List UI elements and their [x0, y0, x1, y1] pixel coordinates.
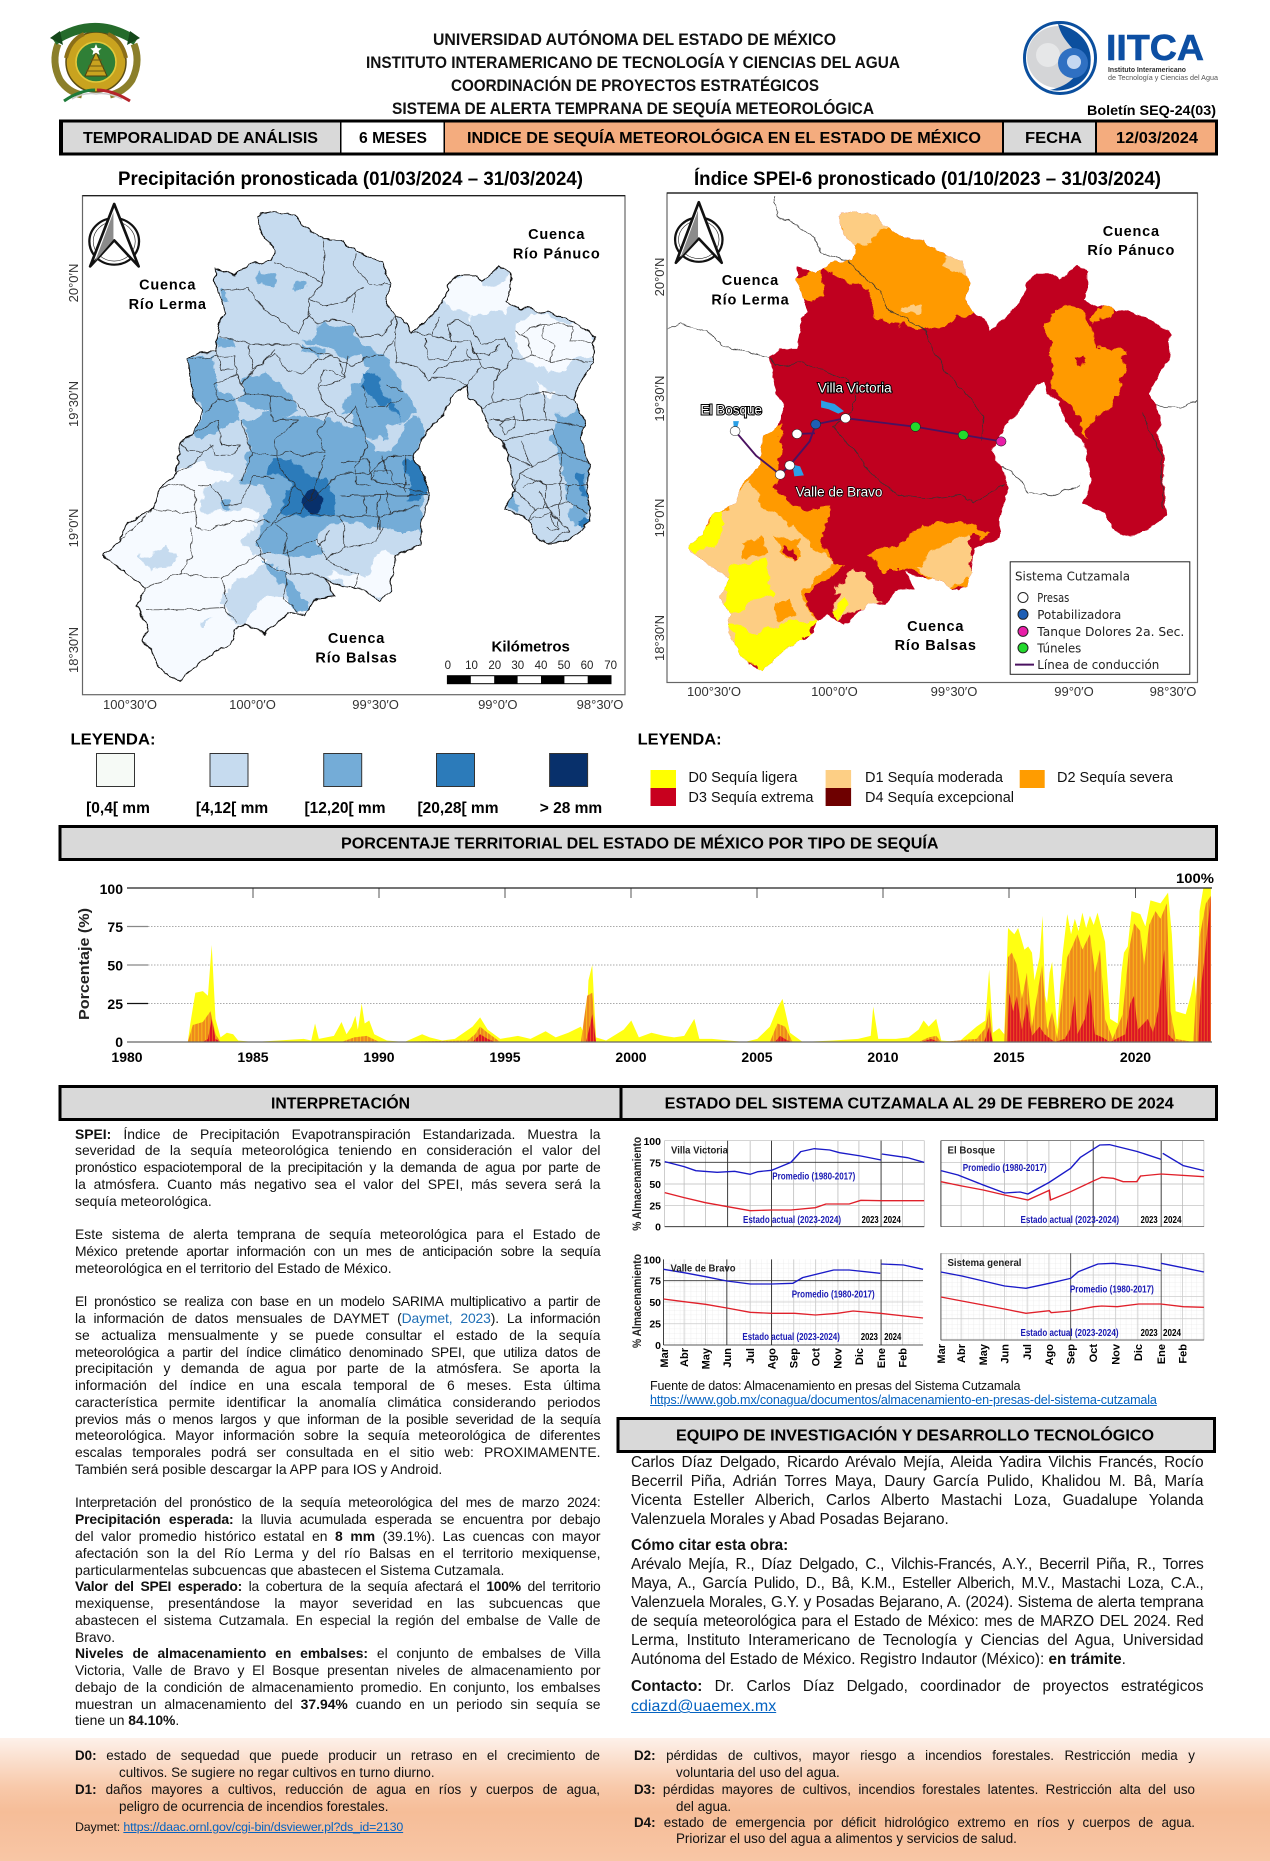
chart labels: El Bosque: 2023 — [1141, 1215, 1158, 1226]
chart labels: El Bosque: 2024 — [1164, 1215, 1182, 1226]
text: citation — [631, 1537, 1204, 1668]
heading: research team: EQUIPO DE INVESTIGACIÓN Y DESARROLLO TECNOLÓGICO — [676, 1426, 1154, 1444]
scale bar: 40 — [535, 660, 547, 672]
text: interpretation: afectación son la del Río Lerma y del río Balsas en el territorio mexiquense, — [75, 1545, 600, 1561]
text: team members: Carlos Díaz Delgado, Ricardo Arévalo Mejía, Aleida Yadira Vilchis Francés, Rocío — [631, 1454, 1204, 1471]
text: interpretation: precipitación y demanda de agua por parte de la atmósfera. Se aporta la — [75, 1360, 600, 1376]
month labels: left: Abr — [679, 1347, 691, 1367]
label: El Bosque: El Bosque — [701, 402, 762, 418]
text: D2 D3 D4 definitions: Priorizar el uso del agua a alimentos y servicios de salud. — [676, 1830, 1017, 1846]
text: contact: cdiazd@uaemex.mx — [631, 1698, 776, 1715]
header strip — [59, 120, 1218, 156]
latitude axis labels: 19°0′N — [66, 509, 81, 547]
text: interpretation: Valor del SPEI esperado: la cobertura de la sequía afectará el 100% del territorio — [75, 1578, 600, 1594]
scale bar: Kilómetros — [492, 638, 570, 656]
text: interpretation: meteorológica en el territorio del Estado de México. — [75, 1260, 392, 1276]
legend: Sistema Cutzamala: Tanque Dolores 2a. Sec. — [1036, 625, 1184, 639]
text: team members — [631, 1454, 1204, 1528]
text: interpretation: Bravo. — [75, 1629, 115, 1645]
text: interpretation: Este sistema de alerta temprana de sequía meteorológica para el Estado de — [75, 1226, 600, 1242]
logo: UAEM crest — [50, 28, 140, 101]
legend: precipitation: [4,12[ mm — [196, 800, 268, 817]
label: Río Lerma basin — [129, 278, 207, 313]
chart: territorial percentage by drought type — [77, 870, 1215, 1065]
panel: Cutzamala storage charts — [632, 1136, 1204, 1369]
text: interpretation: abastecen el sistema Cutzamala. En especial la región del embalse de Valle de — [75, 1612, 600, 1628]
title block: INSTITUTO INTERAMERICANO DE TECNOLOGÍA Y CIENCIAS DEL AGUA — [366, 53, 900, 72]
title block: UNIVERSIDAD AUTÓNOMA DEL ESTADO DE MÉXICO — [433, 30, 836, 49]
text: interpretation: SPEI: Índice de Precipitación Evapotranspiración Estandarizada. Muestra la — [75, 1126, 600, 1142]
chart labels: Villa Victoria: 2023 — [862, 1215, 879, 1226]
heading: interpretation — [60, 1086, 621, 1120]
y axis labels: 75 — [107, 919, 123, 935]
text: contact: Contacto: Dr. Carlos Díaz Delgado, coordinador de proyectos estratégicos — [631, 1678, 1204, 1695]
legend: drought classes: D3 Sequía extrema — [688, 790, 814, 806]
month labels: right: Abr — [956, 1343, 968, 1363]
bulletin number: Boletín SEQ-24(03) — [1087, 102, 1216, 118]
label: Río Balsas basin: Cuenca — [907, 619, 964, 635]
scale bar: 60 — [581, 660, 593, 672]
text: interpretation: Niveles de almacenamiento en embalses: el conjunto de embalses de Villa — [75, 1645, 600, 1661]
latitude axis labels — [66, 264, 81, 673]
longitude axis labels: 100°0′O — [811, 684, 858, 699]
text: D2 D3 D4 definitions: del agua. — [676, 1798, 731, 1814]
map: drought classes — [688, 211, 1172, 672]
longitude axis labels: 100°30′O — [103, 697, 157, 712]
text: interpretation: meteorológica a partir del índice climático denominado SPEI, que utiliza datos de — [75, 1344, 600, 1360]
chart labels: Sistema general: Estado actual (2023-2024) — [1020, 1328, 1118, 1339]
chart labels: El Bosque: Promedio (1980-2017) — [963, 1163, 1047, 1174]
header strip: 12/03/2024 — [1116, 130, 1198, 147]
chart: Valle de Bravo curves — [664, 1259, 923, 1345]
storage axis labels: 50 — [649, 1179, 661, 1191]
chart labels: Valle de Bravo: Estado actual (2023-2024) — [742, 1332, 840, 1343]
full page graphics — [50, 21, 1218, 1453]
text: interpretation: la información de datos mensuales de DAYMET (Daymet, 2023). La información — [75, 1310, 600, 1326]
chart labels: Valle de Bravo: Promedio (1980-2017) — [792, 1290, 875, 1300]
text: D0 D1 definitions: cultivos. Se sugiere no regar cultivos en turno diurno. — [119, 1764, 435, 1780]
legend: drought classes: LEYENDA: — [638, 732, 722, 748]
storage axis labels: 25 — [649, 1200, 661, 1212]
text: contact — [631, 1678, 1204, 1715]
chart labels: Valle de Bravo: 2023 — [861, 1332, 878, 1343]
y axis labels: 0 — [115, 1034, 123, 1050]
heading: drought percentage — [60, 826, 1216, 860]
month labels: left: May — [700, 1347, 712, 1369]
label: Río Balsas basin: Río Balsas — [895, 638, 977, 654]
latitude axis labels: 19°30′N — [66, 381, 81, 427]
label: Río Balsas basin: Río Balsas — [315, 651, 398, 667]
chart labels: Sistema general — [948, 1258, 1181, 1339]
header strip: 6 MESES — [359, 130, 427, 147]
scale bar — [445, 638, 617, 684]
legend: Sistema Cutzamala: Presas — [1037, 591, 1069, 605]
branch line — [797, 431, 815, 436]
label: Río Balsas basin: Cuenca — [328, 631, 385, 647]
storage axis labels: 0 — [655, 1340, 661, 1352]
text: interpretation: particularmentelas subcuencas que abastecen el Sistema Cutzamala. — [75, 1562, 504, 1578]
label: Río Pánuco basin: Río Pánuco — [513, 246, 601, 262]
month labels: left: Nov — [833, 1347, 845, 1369]
storage axis labels: 25 — [649, 1318, 661, 1330]
title block — [366, 30, 900, 118]
legend: drought classes: D1 Sequía moderada — [865, 770, 1004, 786]
x axis labels: 2020 — [1120, 1049, 1151, 1065]
x axis labels: 2010 — [867, 1049, 899, 1065]
text: interpretation: muestran un almacenamiento del 37.94% cuando en un periodo sin sequía se — [75, 1696, 600, 1712]
chart: Villa Victoria curves — [665, 1141, 924, 1227]
text: interpretation: También será posible descargar la APP para IOS y Android. — [75, 1461, 442, 1477]
text: interpretation: severidad de la sequía meteorológica teniendo en consideración el valor del — [75, 1142, 600, 1158]
legend: Sistema Cutzamala — [1010, 562, 1190, 674]
storage axis titles — [632, 1137, 644, 1348]
month labels: right: Ago — [1044, 1344, 1056, 1365]
map: interior basin lines — [771, 261, 1163, 509]
text: D2 D3 D4 definitions: D2: pérdidas de cultivos, mayor riesgo a incendios forestales. Restricción media y — [634, 1748, 1195, 1762]
text: interpretation: debajo de la condición de almacenamiento promedio. En conjunto, los embalses — [75, 1679, 600, 1695]
y axis labels — [100, 881, 123, 1050]
y axis labels: 25 — [107, 996, 123, 1012]
longitude axis labels: 99°30′O — [352, 697, 399, 712]
x axis labels: 1990 — [363, 1049, 395, 1065]
storage axis labels — [643, 1136, 661, 1352]
x axis labels — [111, 1049, 1151, 1065]
x axis labels: 1995 — [489, 1049, 521, 1065]
heading: SPEI map: Índice SPEI-6 pronosticado (01/10/2023 – 31/03/2024) — [694, 168, 1161, 190]
storage axis labels: 50 — [649, 1297, 661, 1309]
system points — [730, 414, 1006, 479]
legend: precipitation: [12,20[ mm — [305, 800, 385, 817]
text: interpretation: Interpretación del pronóstico de la sequía meteorológica del mes de marzo 2024: — [75, 1494, 600, 1510]
month labels: right: Oct — [1088, 1344, 1100, 1362]
text: D2 D3 D4 definitions — [634, 1748, 1195, 1846]
header strip: INDICE DE SEQUÍA METEOROLÓGICA EN EL ESTADO DE MÉXICO — [467, 128, 981, 147]
legend: drought classes: D2 Sequía severa — [1057, 770, 1174, 786]
legend: drought classes: D4 Sequía excepcional — [865, 790, 1014, 806]
text: citation: Arévalo Mejía, R., Díaz Delgado, C., Vilchis-Francés, A.Y., Becerril Piña, R., Torres — [631, 1556, 1204, 1573]
chart labels: Sistema general: Promedio (1980-2017) — [1070, 1284, 1154, 1296]
text: team members: Valenzuela Morales y Abad Posadas Bejarano. — [631, 1511, 949, 1528]
series: D0 — [188, 888, 1211, 1042]
logo: IITCA: de Tecnología y Ciencias del Agua — [1108, 73, 1219, 82]
text: interpretation: Precipitación esperada: la lluvia acumulada esperada se encuentra por debajo — [75, 1511, 600, 1527]
text: data source: Fuente de datos: Almacenamiento en presas del Sistema Cutzamala — [650, 1379, 1020, 1393]
legend: Sistema Cutzamala: Potabilizadora — [1037, 608, 1121, 622]
scale bar: 20 — [488, 660, 501, 672]
chart labels: El Bosque: El Bosque — [948, 1146, 995, 1156]
header strip: FECHA — [1025, 130, 1082, 147]
text: interpretation — [75, 1126, 601, 1728]
longitude axis labels: 98°30′O — [1150, 684, 1196, 699]
text: interpretation: característica permite identificar la anomalía climática considerando periodos — [75, 1394, 600, 1410]
scale bar: 50 — [558, 660, 570, 672]
month labels: right: Nov — [1111, 1343, 1123, 1365]
text: interpretation: se actualiza mensualmente y se puede consultar el estado de la sequía — [75, 1327, 600, 1343]
chart labels: Sistema general: 2024 — [1163, 1328, 1181, 1339]
month labels: right: Jul — [1022, 1344, 1034, 1360]
text: citation: Cómo citar esta obra: — [631, 1537, 788, 1554]
month labels: right: May — [978, 1343, 990, 1365]
scale bar: 30 — [511, 660, 524, 672]
y axis title: Porcentaje (%) — [77, 908, 93, 1020]
text: D2 D3 D4 definitions: D4: estado de emergencia por déficit hidrológico extremo en ríos y cuerpos de agua. — [634, 1814, 1195, 1830]
latitude axis labels — [652, 258, 667, 661]
text: team members: Becerril Piña, Adrián Torres Maya, Daury García Pulido, Khalidou M. Bâ, María — [631, 1473, 1204, 1490]
text: D0 D1 definitions: D1: daños mayores a cultivos, reducción de agua en ríos y cuerpos de agua, — [75, 1782, 600, 1796]
longitude axis labels — [687, 684, 1196, 699]
text: interpretation: sequía meteorológica. — [75, 1193, 212, 1209]
x axis labels: 1985 — [237, 1049, 269, 1065]
chart labels: Valle de Bravo: 2024 — [884, 1332, 902, 1343]
month labels: left: Ene — [876, 1348, 888, 1368]
chart: El Bosque curves — [941, 1141, 1204, 1227]
month labels: right: Feb — [1178, 1344, 1190, 1364]
longitude axis labels — [103, 697, 623, 712]
heading: drought percentage: PORCENTAJE TERRITORIAL DEL ESTADO DE MÉXICO POR TIPO DE SEQUÍA — [341, 836, 938, 852]
text: D2 D3 D4 definitions: voluntaria del uso del agua. — [676, 1764, 840, 1780]
latitude axis labels: 19°30′N — [652, 376, 667, 422]
chart labels: Valle de Bravo — [670, 1264, 902, 1343]
legend: precipitation — [70, 732, 602, 817]
label: Río Balsas basin — [315, 631, 398, 667]
label: Río Pánuco basin — [1087, 224, 1175, 259]
latitude axis labels: 18°30′N — [66, 627, 81, 673]
label: Río Pánuco basin — [513, 227, 601, 262]
latitude axis labels: 19°0′N — [652, 499, 667, 537]
month labels: left: Oct — [810, 1348, 822, 1366]
month labels: left: Ago — [766, 1348, 778, 1369]
month labels: left: Mar — [659, 1347, 671, 1368]
legend: precipitation: [0,4[ mm — [86, 800, 150, 817]
legend: Sistema Cutzamala: Sistema Cutzamala — [1015, 570, 1130, 584]
label: Villa Victoria: Villa Victoria — [818, 380, 892, 396]
text: interpretation: meteorológica. Mayor información sobre la sequía meteorológica de diferentes — [75, 1427, 600, 1443]
text: interpretation: pronóstico espaciotemporal de la precipitación y la demanda de agua por parte de — [75, 1159, 600, 1175]
bottom gradient band — [0, 1738, 1270, 1861]
x axis labels: 2000 — [615, 1049, 647, 1065]
text: citation: Autónoma del Estado de México. Registro Indautor (México): en trámite. — [631, 1651, 1126, 1668]
text: interpretation: previos más o menos largos y que informan de la posible severidad de la sequía — [75, 1411, 600, 1427]
legend: precipitation: > 28 mm — [540, 800, 602, 817]
month labels: right: Sep — [1066, 1344, 1078, 1364]
month labels: right: Dic — [1133, 1344, 1145, 1361]
storage axis labels: 75 — [649, 1157, 661, 1169]
storage axis labels: 100 — [643, 1254, 661, 1266]
text: Daymet reference: Daymet: https://daac.ornl.gov/cgi-bin/dsviewer.pl?ds_id=2130 — [75, 1820, 403, 1834]
month labels: right: Ene — [1156, 1344, 1168, 1364]
longitude axis labels: 99°30′O — [931, 684, 977, 699]
scale bar: 70 — [604, 660, 617, 672]
legend: drought classes — [638, 732, 1174, 806]
chart labels: Villa Victoria — [671, 1146, 901, 1226]
text: interpretation: Victoria, Valle de Bravo y El Bosque presentan niveles de almacenamiento por — [75, 1662, 600, 1678]
heading: Cutzamala status — [621, 1086, 1216, 1120]
text: D0 D1 definitions: D0: estado de sequedad que puede producir un retraso en el crecimiento de — [75, 1748, 600, 1762]
latitude axis labels: 20°0′N — [652, 258, 667, 296]
chart labels: El Bosque: Estado actual (2023-2024) — [1020, 1215, 1119, 1226]
scale bar: 0 — [445, 660, 451, 672]
chart labels: Valle de Bravo: Valle de Bravo — [670, 1264, 736, 1274]
conduction line — [735, 418, 1001, 475]
text: D0 D1 definitions — [75, 1748, 600, 1814]
map: precipitation classes and state outline — [102, 211, 596, 682]
chart labels: El Bosque — [948, 1146, 1182, 1226]
longitude axis labels: 99°0′O — [478, 697, 518, 712]
label: Río Pánuco basin: Cuenca — [528, 227, 585, 243]
text: data source: https://www.gob.mx/conagua/documentos/almacenamiento-en-presas-del-sistema-cutzamala — [650, 1393, 1157, 1407]
text: interpretation: El pronóstico se realiza con base en un modelo SARIMA multiplicativo a partir de — [75, 1293, 600, 1309]
heading: research team — [618, 1418, 1214, 1452]
text: interpretation: mexiquense, presentándose la mayor severidad en las subcuencas que — [75, 1595, 600, 1611]
callout: 100%: 100% — [1176, 870, 1215, 886]
logo: IITCA: IITCA — [1106, 27, 1204, 68]
month labels: left: Sep — [789, 1348, 801, 1368]
month labels: right: Mar — [936, 1343, 948, 1364]
month labels: right: Jun — [1000, 1344, 1012, 1364]
legend: Sistema Cutzamala: Túneles — [1036, 642, 1081, 656]
longitude axis labels: 99°0′O — [1054, 684, 1094, 699]
longitude axis labels: 100°0′O — [229, 697, 276, 712]
label: Río Lerma basin: Cuenca — [722, 273, 779, 289]
map: outside basin lines — [667, 195, 1198, 497]
icon: reservoirs — [733, 400, 844, 476]
heading: precipitation map: Precipitación pronosticada (01/03/2024 – 31/03/2024) — [118, 169, 583, 190]
legend: precipitation: [20,28[ mm — [418, 800, 498, 817]
chart labels: Villa Victoria: Estado actual (2023-2024) — [743, 1215, 841, 1226]
label: Río Balsas basin — [895, 619, 977, 654]
text: citation: Lerma, Instituto Interamericano de Tecnología y Ciencias del Agua, Universidad — [631, 1632, 1204, 1649]
legend: drought classes: D0 Sequía ligera — [688, 770, 798, 786]
label: Río Lerma basin: Cuenca — [139, 278, 196, 294]
chart: Sistema general curves — [941, 1253, 1204, 1340]
storage axis titles: % Almacenamiento — [632, 1254, 644, 1348]
longitude axis labels: 100°30′O — [687, 684, 741, 699]
text: citation: de sequía meteorológica para el Estado de México: mes de MARZO DEL 2024. Red — [631, 1613, 1204, 1630]
chart labels: Sistema general: Sistema general — [948, 1258, 1022, 1269]
text: interpretation: información del índice en una escala temporal de 6 meses. Esta última — [75, 1377, 600, 1393]
storage axis labels: 100 — [643, 1136, 661, 1148]
latitude axis labels: 20°0′N — [66, 264, 81, 302]
month labels: left: Feb — [897, 1348, 909, 1368]
title block: COORDINACIÓN DE PROYECTOS ESTRATÉGICOS — [451, 76, 819, 95]
text: interpretation: del valor promedio histórico estatal en 8 mm (39.1%). Las cuencas con mayor — [75, 1528, 600, 1544]
text: data source — [650, 1379, 1157, 1407]
month labels: left — [659, 1347, 909, 1369]
legend: precipitation: LEYENDA: — [70, 732, 156, 748]
heading: interpretation: INTERPRETACIÓN — [271, 1094, 410, 1112]
map: municipal boundaries — [119, 240, 593, 624]
logo: IITCA: Instituto Interamericano — [1108, 65, 1186, 74]
storage axis labels: 0 — [655, 1222, 661, 1234]
series: D3 — [203, 896, 1211, 1042]
latitude axis labels: 18°30′N — [652, 615, 667, 661]
x axis labels: 1980 — [111, 1049, 143, 1065]
text: D2 D3 D4 definitions: D3: pérdidas mayores de cultivos, incendios forestales latentes. Restricción alta del uso — [634, 1782, 1195, 1796]
text: interpretation: escalas temporales podrá ser consultada en el sitio web: PROXIMAMENTE. — [75, 1444, 600, 1460]
header strip: TEMPORALIDAD DE ANÁLISIS — [83, 128, 318, 147]
longitude axis labels: 98°30′O — [577, 697, 623, 712]
text: interpretation: la atmósfera. Cuanto más negativo sea el valor del SPEI, más severa será la — [75, 1176, 600, 1192]
label: Río Lerma basin — [711, 273, 790, 308]
text: interpretation: tiene un 84.10%. — [75, 1712, 179, 1728]
storage axis titles: % Almacenamiento — [632, 1137, 644, 1231]
month labels: left: Jul — [745, 1348, 757, 1364]
title block: SISTEMA DE ALERTA TEMPRANA DE SEQUÍA METEOROLÓGICA — [392, 99, 874, 118]
text: team members: Vicenta Esteller Alberich, Carlos Alberto Mastachi Loza, Guadalupe Yolanda — [631, 1492, 1204, 1509]
scale bar: 10 — [465, 660, 478, 672]
x axis labels: 2015 — [993, 1049, 1025, 1065]
label: Valle de Bravo: Valle de Bravo — [796, 484, 882, 500]
y axis labels: 50 — [107, 958, 123, 974]
chart labels: Villa Victoria: Promedio (1980-2017) — [772, 1172, 855, 1182]
chart labels: Villa Victoria: 2024 — [883, 1215, 901, 1226]
chart labels: Sistema general: 2023 — [1141, 1328, 1158, 1339]
logo: IITCA — [1024, 22, 1219, 94]
label: Río Pánuco basin: Cuenca — [1103, 224, 1160, 240]
panel: precipitation map — [66, 196, 625, 712]
label: Río Pánuco basin: Río Pánuco — [1087, 243, 1175, 259]
label: Río Lerma basin: Río Lerma — [711, 292, 790, 308]
storage axis labels: 75 — [649, 1276, 661, 1288]
legend: Sistema Cutzamala: Línea de conducción — [1037, 658, 1159, 672]
y axis labels: 100 — [100, 881, 123, 897]
label: Río Lerma basin: Río Lerma — [129, 297, 207, 313]
heading: Cutzamala status: ESTADO DEL SISTEMA CUTZAMALA AL 29 DE FEBRERO DE 2024 — [665, 1096, 1174, 1112]
x axis labels: 2005 — [741, 1049, 773, 1065]
icon: north arrow — [89, 204, 139, 266]
text: D0 D1 definitions: peligro de ocurrencia de incendios forestales. — [119, 1798, 388, 1814]
text: interpretation: México pretende aportar información con un mes de anticipación sobre la sequía — [75, 1243, 600, 1259]
series: D2 — [188, 896, 1211, 1042]
month labels: left: Dic — [854, 1348, 866, 1365]
text: citation: Valenzuela Morales, G.Y. y Posadas Bejarano, A. (2024). Sistema de alerta temprana — [631, 1594, 1204, 1611]
icon: north arrow — [675, 202, 722, 263]
month labels: right — [936, 1343, 1190, 1365]
chart labels: Villa Victoria: Villa Victoria — [671, 1146, 728, 1156]
panel: SPEI map — [652, 193, 1203, 702]
month labels: left: Jun — [722, 1348, 734, 1368]
text: citation: Maya, A., García Pulido, D., Bâ, K.M., Esteller Alberich, M.V., Mastachi Loza, C.A., — [631, 1575, 1204, 1592]
